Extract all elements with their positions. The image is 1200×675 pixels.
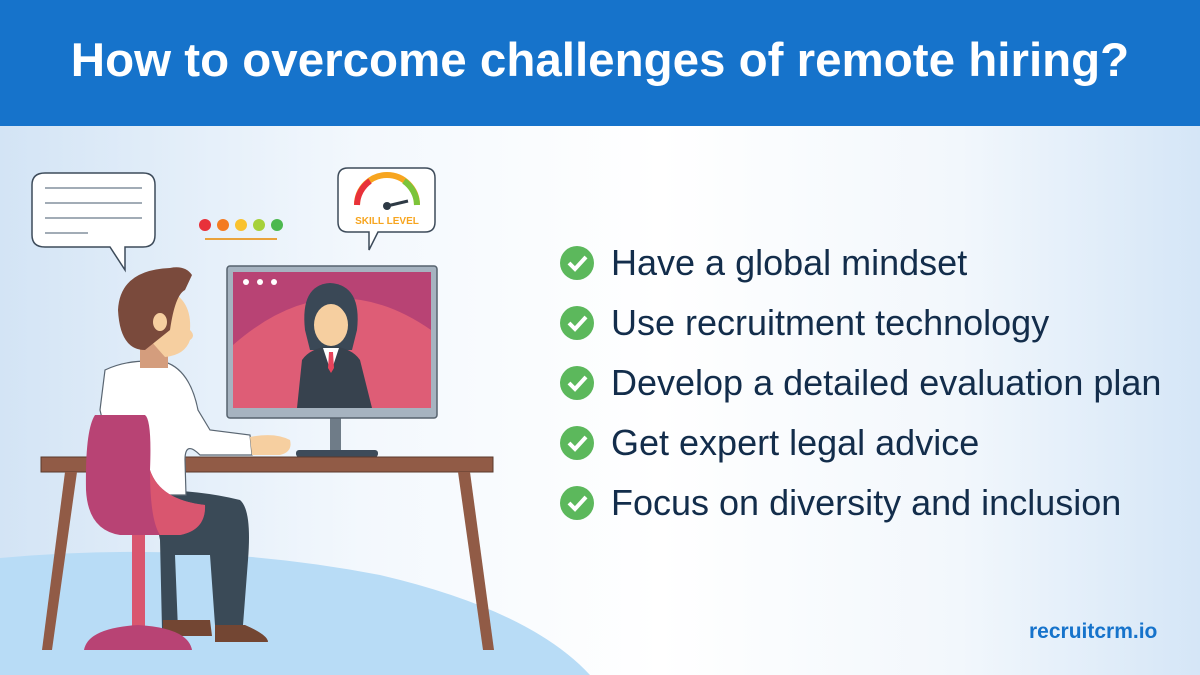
title	[0, 0, 1200, 126]
floor	[0, 552, 590, 675]
item 4: Get expert legal advice	[611, 422, 979, 463]
man	[100, 267, 291, 642]
item 5: Focus on diversity and inclusion	[611, 482, 1121, 523]
chair	[84, 415, 205, 650]
item 2: Use recruitment technology	[611, 302, 1049, 343]
desk	[41, 457, 494, 650]
rating emojis	[199, 219, 283, 240]
logo: recruitcrm.io	[1029, 620, 1157, 643]
item 1: Have a global mindset	[611, 242, 967, 283]
item 3: Develop a detailed evaluation plan	[611, 362, 1161, 403]
checklist	[560, 242, 1161, 523]
illustration	[0, 167, 590, 675]
speech bubble	[32, 173, 155, 270]
monitor	[227, 266, 437, 457]
title: How to overcome challenges of remote hiring?	[71, 34, 1129, 87]
skill level bubble	[338, 168, 435, 250]
skill level bubble: SKILL LEVEL	[355, 216, 419, 227]
